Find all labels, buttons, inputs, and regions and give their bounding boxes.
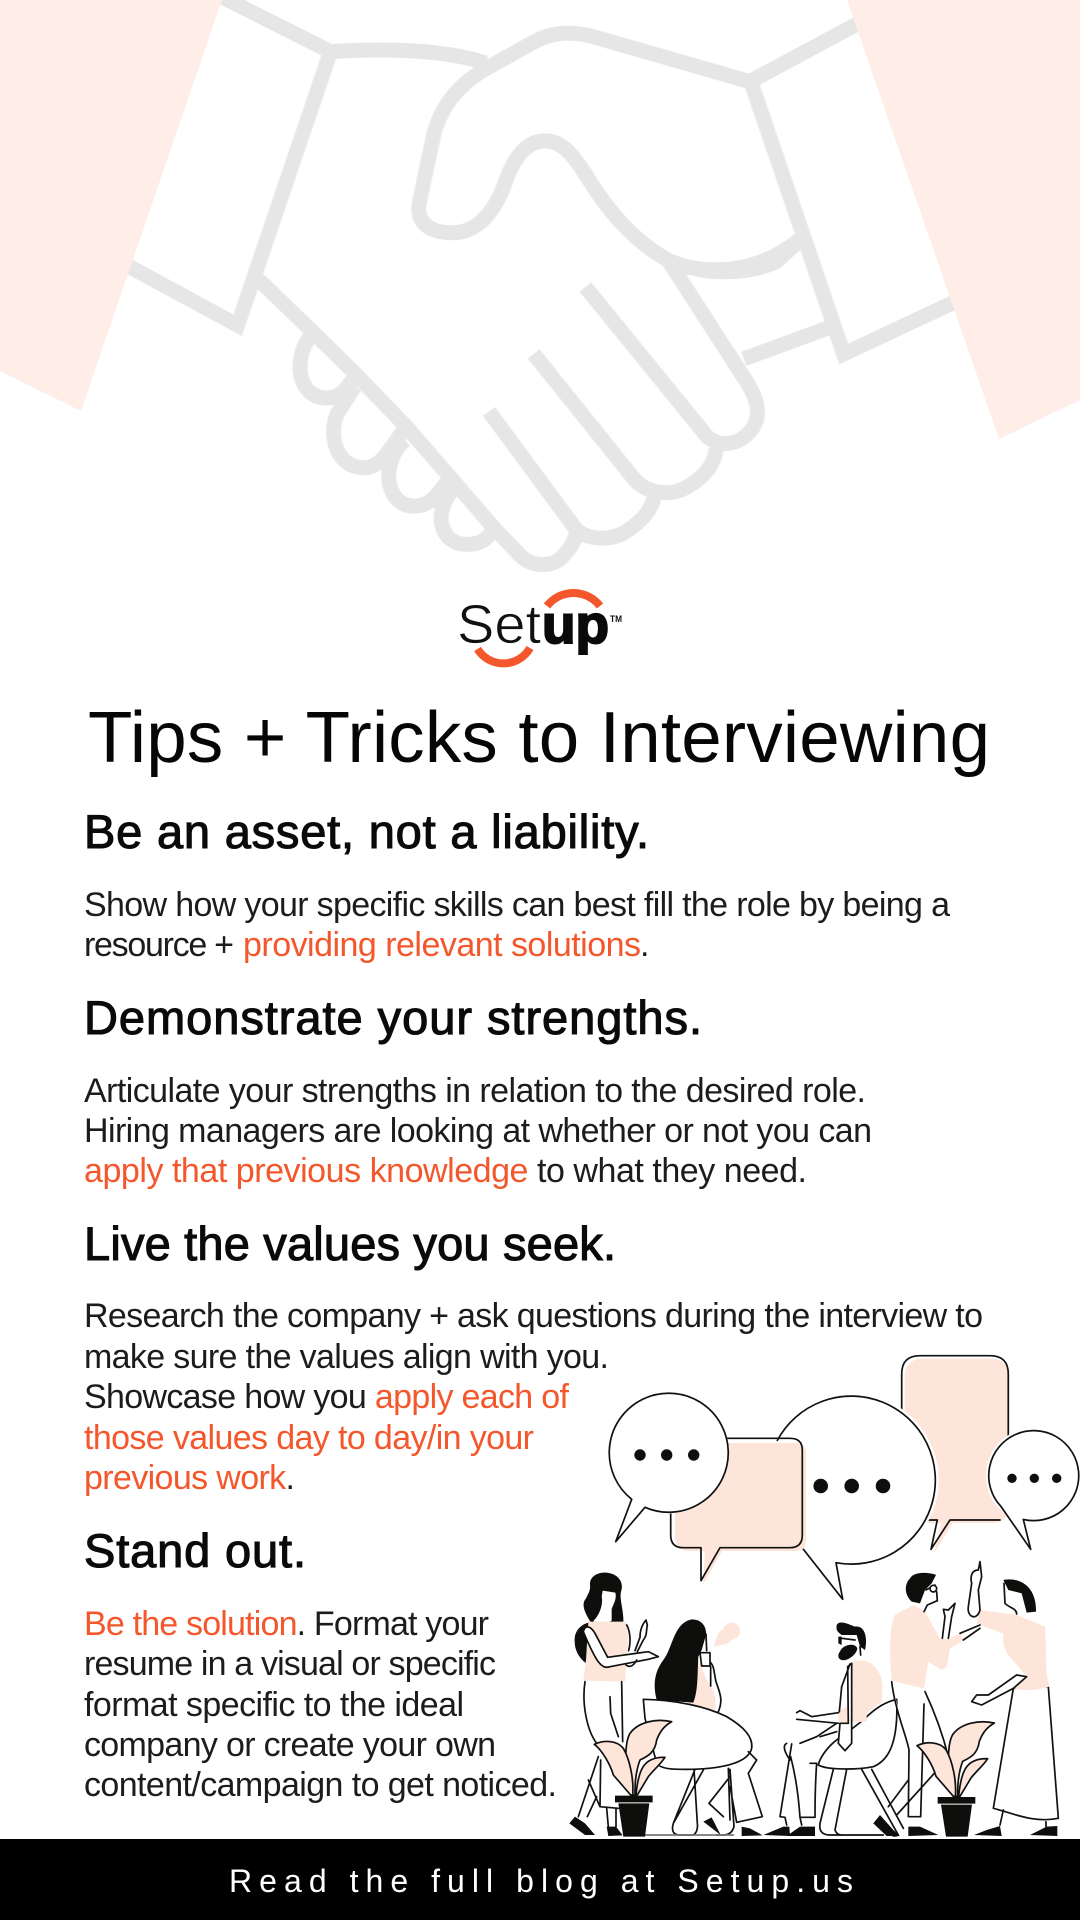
body line: resume in a visual or specific — [84, 1645, 496, 1683]
footer bar — [0, 1839, 1080, 1920]
small round bubble right — [986, 1428, 1080, 1549]
logo top arc — [547, 593, 600, 606]
section 4 — [84, 1524, 557, 1804]
tall pink bubble — [902, 1356, 1009, 1553]
small round bubble left — [605, 1390, 729, 1542]
body line: Hiring managers are looking at whether or not you can — [84, 1112, 872, 1150]
body line: format specific to the ideal — [84, 1686, 464, 1724]
body line with highlight: . — [640, 926, 649, 964]
logo wordmark: Set — [457, 593, 541, 655]
square pink bubble — [671, 1438, 806, 1585]
section 3 — [84, 1217, 983, 1497]
logo bold wordmark: up — [542, 595, 609, 655]
people left group — [569, 1573, 763, 1837]
body line with highlight: Showcase how you apply each of — [84, 1378, 570, 1416]
body line: Articulate your strengths in relation to the desired role. — [84, 1072, 866, 1110]
woman seated with cup — [643, 1619, 763, 1836]
heading: Live the values you seek. — [84, 1217, 616, 1270]
body line with highlight: Be the solution. Format your — [84, 1605, 489, 1643]
man seated — [763, 1623, 903, 1836]
woman standing with raised hand — [960, 1562, 1058, 1836]
steam — [713, 1623, 740, 1647]
body line with highlight: resource + — [84, 926, 234, 964]
dots — [634, 1449, 699, 1461]
highlighted line end: previous work. — [84, 1459, 295, 1497]
highlighted line: those values day to day/in your — [84, 1419, 534, 1457]
body line with highlight: providing relevant solutions — [243, 926, 641, 964]
heading: Be an asset, not a liability. — [84, 805, 649, 858]
dots — [813, 1479, 890, 1493]
people right group — [763, 1562, 1058, 1837]
heading: Stand out. — [84, 1524, 306, 1577]
right pink sleeve — [847, 0, 1080, 439]
plant right — [917, 1722, 994, 1837]
body line with highlight: apply that previous knowledge to what they need. — [84, 1152, 807, 1190]
body line: Research the company + ask questions during the interview to — [84, 1297, 983, 1335]
logo trademark: TM — [610, 614, 622, 624]
body line: company or create your own — [84, 1726, 496, 1764]
man standing — [873, 1573, 964, 1836]
body line: Show how your specific skills can best fill the role by being a — [84, 886, 950, 924]
left pink sleeve — [0, 0, 222, 411]
section 1 — [84, 805, 950, 964]
footer text: Read the full blog at Setup.us — [229, 1863, 853, 1899]
logo: Setup — [457, 593, 622, 663]
speech bubbles — [605, 1356, 1080, 1599]
dots — [1007, 1474, 1061, 1483]
body line: make sure the values align with you. — [84, 1338, 609, 1376]
woman standing — [569, 1573, 658, 1836]
icon: handshake — [90, 0, 999, 565]
large round bubble — [765, 1393, 939, 1599]
logo bottom arc — [478, 648, 530, 663]
section 2 — [84, 991, 872, 1190]
plant left — [594, 1720, 733, 1837]
body line: content/campaign to get noticed. — [84, 1766, 557, 1804]
heading: Demonstrate your strengths. — [84, 991, 702, 1044]
title: Tips + Tricks to Interviewing — [88, 697, 990, 778]
